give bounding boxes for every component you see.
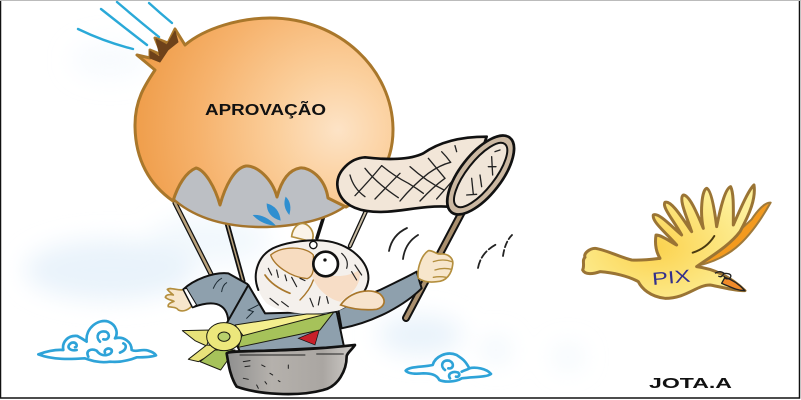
bird wing line [693, 236, 714, 253]
hair knob [292, 223, 313, 242]
cheek line [300, 280, 313, 300]
president in basket [165, 223, 453, 394]
basket [227, 345, 355, 394]
shirt and tie [298, 325, 321, 345]
bird pix [583, 185, 771, 298]
net bag [337, 137, 487, 212]
sweat drops [253, 197, 290, 226]
bird far wing [697, 203, 771, 266]
hoop mesh [467, 150, 500, 195]
left arm [183, 273, 265, 323]
cloud right [406, 354, 491, 382]
balloon [135, 18, 393, 207]
balloon body [135, 18, 393, 207]
right hand [418, 251, 453, 282]
beard strokes [268, 253, 362, 307]
speed lines [78, 2, 172, 49]
right arm [338, 272, 422, 328]
bird beak [722, 277, 745, 291]
bird body and wing [583, 185, 754, 298]
mouth [265, 275, 290, 293]
left cuff [183, 288, 197, 307]
left hand [165, 289, 193, 311]
label: aprovacao: APROVAÇÃO [205, 101, 326, 119]
ear [341, 291, 384, 310]
bird eye [715, 272, 731, 279]
balloon knot [150, 31, 178, 62]
net handle [406, 212, 462, 318]
sash [182, 312, 334, 370]
eye [313, 252, 338, 276]
arm creases [213, 278, 258, 318]
head outline [256, 240, 368, 298]
balloon skirt [172, 160, 347, 227]
butterfly net [337, 125, 526, 225]
pupil [323, 258, 327, 262]
signature: JOTA.A [649, 375, 732, 392]
cloud left [38, 321, 156, 362]
net mesh [350, 146, 457, 201]
face skin [310, 268, 360, 302]
far eye [310, 241, 317, 249]
balloon ropes [175, 203, 366, 281]
basket marks [240, 354, 343, 388]
net hoop [435, 125, 526, 225]
nose [271, 248, 314, 279]
head [255, 240, 368, 314]
torso [227, 285, 344, 352]
medal [207, 323, 241, 351]
label: pix: PIX [651, 266, 691, 289]
ribbon tails [182, 330, 212, 346]
motion lines [389, 228, 512, 268]
